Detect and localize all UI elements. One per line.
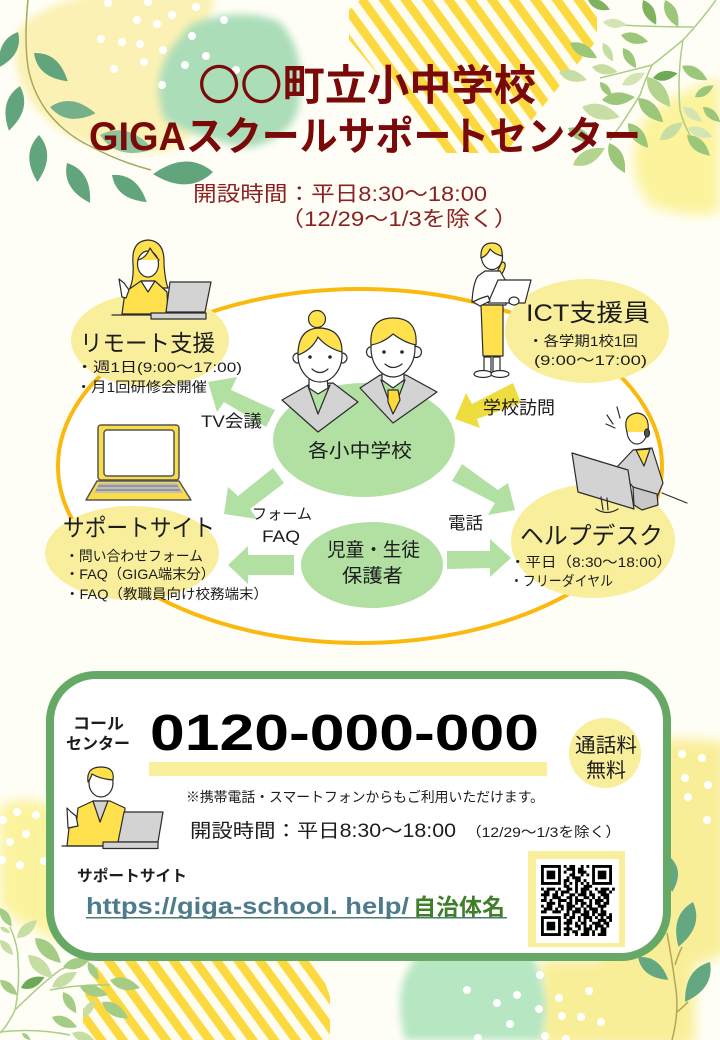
badge: free call: 無料 — [586, 759, 626, 782]
node: help desk — [510, 484, 675, 598]
node: help desk: ヘルプデスク — [520, 523, 663, 550]
arrow: school to help desk — [452, 464, 515, 515]
node: ICT support staff: ICT支援員 — [526, 300, 650, 327]
node: remote support: リモート支援 — [80, 330, 215, 356]
node: remote support — [71, 293, 242, 395]
badge: free call: 通話料 — [575, 734, 637, 757]
leaves: bottom left branch — [0, 906, 141, 1040]
label: form FAQ: フォーム — [252, 506, 312, 523]
label: telephone: 電話 — [448, 514, 483, 533]
icon: help desk operator — [572, 407, 687, 512]
call center label — [66, 716, 130, 753]
label: TV conference: TV会議 — [201, 412, 262, 431]
arrow: students to help desk — [447, 539, 511, 577]
node: students and parents: 保護者 — [342, 565, 403, 587]
support site url — [86, 893, 507, 920]
diagram orbit ellipse — [58, 289, 662, 643]
node: school — [273, 383, 455, 497]
node: support site — [45, 506, 268, 602]
leaves: top right branch — [557, 0, 720, 176]
background decoration: top — [16, 0, 720, 215]
node: help desk: ・平日（8:30～18:00） — [510, 554, 672, 570]
opening hours: （12/29～1/3を除く） — [280, 208, 518, 231]
node: help desk: ・フリーダイヤル — [510, 573, 613, 589]
support site label: サポートサイト — [77, 867, 187, 885]
icon: laptop — [86, 425, 191, 500]
label: form FAQ: FAQ — [262, 527, 300, 546]
arrow: school to remote support — [208, 377, 275, 427]
title: 〇〇町立小中学校 — [198, 62, 536, 109]
call center hours: （12/29～1/3を除く） — [466, 824, 621, 840]
call center hours — [190, 820, 621, 842]
node: ICT support staff: ・各学期1校1回 — [528, 333, 638, 349]
call center hours: 開設時間：平日8:30～18:00 — [190, 820, 456, 842]
opening hours — [193, 183, 518, 231]
node: support site: ・FAQ（GIGA端末分） — [65, 566, 215, 582]
node: remote support: ・月1回研修会開催 — [76, 379, 207, 395]
node: support site: サポートサイト — [63, 515, 215, 542]
background decoration: bottom — [0, 739, 720, 1040]
icon: ICT staff woman with laptop — [472, 243, 531, 378]
node: school: 各小中学校 — [308, 440, 412, 462]
leaves: top left branch — [0, 0, 213, 209]
node: support site: ・問い合わせフォーム — [65, 548, 203, 564]
node: remote support: ・週1日(9:00～17:00) — [76, 359, 242, 375]
node: ICT support staff: (9:00～17:00) — [534, 352, 647, 368]
call center label: コール — [73, 716, 124, 733]
support site url: 自治体名 — [413, 894, 505, 920]
label: form FAQ — [252, 506, 312, 546]
node: students and parents — [301, 522, 443, 608]
QR code — [528, 851, 625, 947]
arrow: students to support site — [228, 546, 294, 584]
icon: call center man — [62, 767, 163, 848]
title — [89, 62, 641, 159]
panel: call center — [50, 675, 667, 957]
opening hours: 開設時間：平日8:30～18:00 — [193, 183, 487, 206]
icon: schoolgirl teacher — [282, 310, 358, 432]
label: school visit: 学校訪問 — [483, 398, 555, 418]
icon: school boy teacher — [360, 318, 437, 423]
icon: remote support woman — [112, 240, 211, 319]
support site url: https://giga-school. help/ — [86, 893, 410, 919]
call center label: センター — [66, 735, 130, 753]
phone underline bar — [149, 762, 547, 776]
title: GIGAスクールサポートセンター — [89, 115, 641, 159]
phone number: 0120-000-000 — [150, 704, 539, 761]
leaves: bottom right branch — [634, 858, 718, 1040]
node: ICT support staff — [505, 279, 669, 383]
node: support site: ・FAQ（教職員向け校務端末） — [65, 586, 268, 602]
note: mobile phones: ※携帯電話・スマートフォンからもご利用いただけます。 — [186, 789, 544, 805]
badge: free call — [569, 718, 641, 788]
node: students and parents: 児童・生徒 — [327, 539, 420, 561]
arrow: ICT staff to school — [455, 383, 521, 428]
arrow: school to support site — [224, 468, 284, 519]
